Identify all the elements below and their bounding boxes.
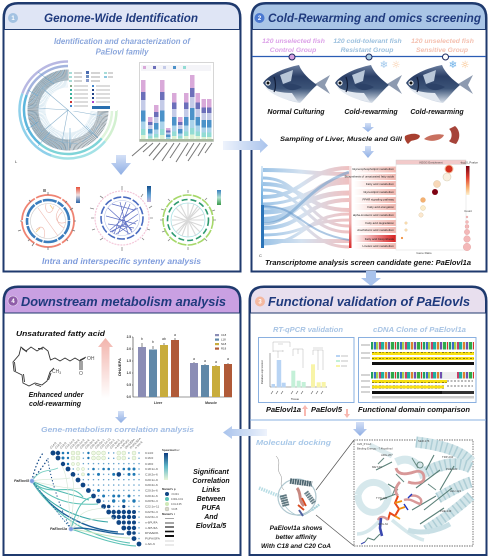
correlation heading: Gene-metabolism correlation analysis [41,425,194,434]
correlation heatmap: DHA/EPA [145,531,159,535]
docking close-up: TRP-204 [442,455,454,459]
icon: up arrow [302,405,308,416]
qPCR chart [258,338,354,402]
step number 2: 2 [258,16,262,22]
bubble plot row labels: alpha-Linolenic acid metabolism [353,213,395,217]
docking close-up: PHE-220 [446,467,458,471]
qPCR chart: Relative expression [260,359,264,384]
docking caption [261,525,331,550]
step number 4: 4 [11,299,15,305]
group label: sensitive: 120 unselected fish [411,38,474,45]
docking caption: With C18 and C20 CoA [261,543,331,550]
bubble plot row labels: Biosynthesis of unsaturated fatty acids [345,174,395,178]
stacked bar chart [132,62,214,162]
bubble plot row labels: Linoleic acid metabolism [362,244,395,248]
protein structure overview [259,456,320,516]
correlation heatmap: C22:6n-3 [145,515,158,519]
heatmap legends: >0.05 [171,508,178,511]
enhanced caption: Enhanced under [29,392,85,399]
bubble plot row labels: Fatty acid metabolism [366,182,395,186]
bubble plot row labels: Arachidonic acid metabolism [357,228,395,232]
group label: resistant [333,38,402,54]
panel header band [252,4,486,30]
docking close-up: SER-176 [418,439,430,443]
panel header band [4,288,240,313]
bar chart: DHA/EPA: L18 [221,338,226,342]
correlation heatmap: C20:1n-9 [145,478,158,482]
gene node: PaElovl1a: PaElovl1a [50,527,67,531]
gene node: PaElovl5: PaElovl5 [14,479,30,483]
section divider [250,419,486,421]
docking close-up: PHE-243 [440,509,452,513]
correlation heatmap: C20:3n-6 [84,438,96,450]
colour scale [147,186,151,202]
bubble plot row labels [345,166,396,249]
fish captions [267,109,464,116]
transcriptome caption: Transcriptome analysis screen candidate gene: PaElovl1a [265,260,471,267]
group label: control: 120 unselected fish [262,38,325,45]
heatmap legends: 0.01-0.05 [171,503,182,506]
bar chart: DHA/EPA: a [193,357,195,361]
bubble plot row labels: PPAR signaling pathway [363,198,395,202]
heading: Cold-Rewarming and omics screening [268,11,482,25]
correlation heatmap: C20:2n-6 [145,483,158,487]
qPCR caption: PaElovl1a [266,407,301,414]
bubble plot row labels: Fatty acid degradation [365,221,394,225]
panel: functional validation [250,286,486,555]
zoom lines [316,440,354,546]
docking close-up: TYR-120 [376,496,388,500]
panel frame [4,3,240,272]
significant correlation note: Correlation [192,478,230,485]
correlation heatmap: C20:4n-6 [89,438,101,450]
icons: cold and warm [380,60,470,71]
bar chart: DHA/EPA: Muscle [205,401,217,405]
panel: downstream metabolism analysis [4,286,240,555]
arrow: to sampling [362,123,374,132]
caption: synteny: Intra and interspecific synteny analysis [42,257,202,266]
significant correlation note: Significant [193,469,230,476]
correlation heatmap: C20:2n-6 [79,438,91,450]
panel frame [252,3,486,272]
heatmap legends: 0.001-0.01 [171,498,184,501]
bubble plot row labels: Glycerolipid metabolism [363,190,395,194]
bar chart: DHA/EPA: DHA/EPA [117,358,122,376]
fish: sensitive [406,65,473,103]
group label: control: Control Group [270,47,316,54]
significant correlation note: Elovl1a/5 [196,523,226,530]
correlation heatmap: C22:5n-3 [145,510,158,514]
correlation heatmap: C18:2n-6 [69,438,81,450]
significant correlation note: Links [202,487,220,494]
molecule: unsaturated fatty acid: CH [52,369,59,375]
heatmap legends: Mantel's p [162,487,176,491]
subtitle: PaElovl family [96,48,149,56]
correlation heatmap [49,437,161,547]
correlation heatmap: PUFA/SFA [129,437,142,450]
bar chart: DHA/EPA: b [141,337,143,341]
arrow: panel 3 to panel 4 [223,426,267,439]
panel frame [250,286,486,555]
docking caption: PaElovl1a shows [270,525,323,532]
significant correlation note: Between [197,496,225,503]
group label: resistant: Resistant Group [341,47,393,54]
synteny circos: intraspecific [18,189,76,250]
gene node: PaElovl5 [14,479,34,483]
fish: resistant [335,65,402,103]
enhanced caption [29,392,85,408]
docking close-up: MET-66 [372,465,382,469]
icons: cold and warm: ☼ [392,60,401,71]
docking close-up: ARG-267 [381,453,393,457]
bar chart: DHA/EPA: 2.5 [127,335,131,339]
fish captions: Cold-rewarming [410,109,464,116]
bar chart: DHA/EPA: 0.5 [127,383,131,387]
bubble plot row labels: Glycerophospholipid metabolism [352,167,395,171]
correlation heatmap: C20:1n-9 [74,438,86,450]
heading: Downstream metabolism analysis [21,294,226,309]
bar chart: DHA/EPA: 0.0 [127,395,131,399]
fish captions: Cold-rewarming [344,109,398,116]
heatmap legends: Mantel's r [162,512,176,516]
step number 1 [8,13,18,23]
correlation heatmap: C22:1n-11 [99,437,112,450]
arrow: to correlation analysis [115,411,127,423]
bubble plot row labels: Fatty acid elongation [367,205,394,209]
correlation heatmap: n-6PUFA [114,438,125,450]
sequence alignment [358,338,476,402]
correlation heatmap: C14:0 [49,441,58,450]
sankey panel letter: C [259,253,262,258]
bar chart: DHA/EPA: 1.0 [127,371,131,375]
step number 3: 3 [258,300,262,306]
bar chart: DHA/EPA: N18 [221,342,227,346]
step number 3 [255,296,265,306]
correlation heatmap: C18:0 [59,441,68,450]
bar chart: DHA/EPA: a [204,359,206,363]
qPCR chart: Tissue [291,397,300,401]
group label: sensitive [411,38,474,54]
icons: cold and warm: ❄ [449,60,457,71]
bar chart: DHA/EPA: 1.5 [127,359,131,363]
group timeline [252,54,486,60]
correlation heatmap: n-3/n-6 [145,542,155,546]
subtitle [54,37,191,56]
correlation heatmap: C16:0 [54,441,63,450]
bar chart: DHA/EPA [117,333,232,405]
correlation heatmap: C22:6n-3 [109,438,121,450]
heading: Genome-Wide Identification [44,11,198,25]
qPCR caption: PaElovl5 [311,407,342,414]
sub-heading: cDNA clone: cDNA Clone of PaElovl1a [373,327,466,334]
arrow: to transcriptome [362,146,374,158]
sub-heading: RT-qPCR: RT-qPCR validation [273,327,343,334]
circular phylogenetic tree [0,42,136,178]
bar chart: DHA/EPA: a [227,357,229,361]
icons: cold and warm: ❄ [380,60,388,71]
icons: organs [405,126,459,144]
subtitle: Identification and characterization of [54,37,191,46]
group label: resistant: 120 cold-tolerant fish [333,38,402,45]
step number 4 [8,296,18,306]
bar chart: DHA/EPA: 2.0 [127,347,131,351]
significant correlation note: And [203,514,219,521]
panel: cold-rewarming and omics screening [252,3,486,272]
correlation heatmap: C20:4n-6 [145,494,158,498]
arrow: panel 1 to panel 2 [223,138,268,153]
docking close-up: LEU-124 [450,489,461,493]
bar chart: DHA/EPA: b [152,340,154,344]
bar chart: DHA/EPA: Liver [154,401,163,405]
bubble plot row labels: Fatty acid biosynthesis [365,237,395,241]
synteny circos: third species [160,190,216,250]
bar chart: DHA/EPA: ab [162,337,166,341]
bar chart: DHA/EPA: R18 [221,346,227,350]
arrow: enhanced up [98,338,113,398]
synteny circos: interspecific [90,186,153,251]
correlation heatmap: C20:5n-3 [94,438,106,450]
tree legend [69,67,117,111]
gene node: PaElovl1a [50,527,73,531]
group label: control [262,38,325,54]
correlation heatmap: n-3/n-6 [134,440,144,450]
docking heading: Molecular docking [256,438,331,447]
correlation heatmap: C18:0 [145,462,154,466]
bar chart: DHA/EPA: C18 [221,333,227,337]
group label: sensitive: Sensitive Group [416,47,468,54]
bubble plot legend [460,160,478,251]
significant correlation note [192,469,230,530]
step number 1: 1 [11,16,15,22]
bar chart: DHA/EPA: a [174,333,176,337]
bubble plot legend: Count [464,209,472,213]
correlation heatmap: C20:5n-3 [145,499,158,503]
colour scale [76,187,80,203]
icons: cold and warm: ☼ [461,60,470,71]
docking close-up: ARG-62 [378,522,389,526]
docking close-up: Binding Energy: -7.4kcal/mol [357,446,393,450]
panel: genome-wide identification [0,3,240,272]
colour scale [217,190,221,205]
correlation heatmap: C18:1n-9 [145,467,158,471]
correlation heatmap: C22:5n-3 [104,438,116,450]
icon: down arrow [344,409,350,418]
correlation heatmap: C16:0 [145,456,154,460]
arrow: down to synteny [111,155,131,175]
correlation network links [32,453,136,546]
bar chart: DHA/EPA: a [215,360,217,364]
panel frame [4,286,240,555]
docking close-up: C20_6'CoA [357,442,371,446]
correlation heatmap: C18:1n-9 [64,438,76,450]
correlation heatmap: n-3PUFA [119,438,130,450]
bubble plot: KEGG Enrichment [419,160,443,164]
correlation heatmap: C18:2n-6 [145,472,158,476]
bubble plot legend: -log10_Pvalue [460,160,478,164]
bubble plot [396,160,466,250]
molecule: unsaturated fatty acid: OH [87,356,95,362]
alignment caption: Functional domain comparison [358,407,470,414]
correlation heatmap: n-3PUFA [145,526,158,530]
heatmap legends [162,448,184,545]
arrow: panel 2 to panel 3 [361,271,381,286]
panel header band [250,288,486,313]
sankey diagram [261,166,352,248]
panel header band [4,4,240,30]
fish: normal culturing [263,65,330,103]
axis label: Gene Ratio [416,251,432,255]
correlation heatmap: DHA/EPA [124,438,136,450]
correlation heatmap: PUFA/SFA [145,536,161,540]
significant correlation note: PUFA [202,505,220,512]
correlation heatmap: n-6PUFA [145,520,158,524]
correlation heatmap: C22:1n-11 [145,504,159,508]
correlation heatmap: C14:0 [145,451,154,455]
fatty acid heading: Unsaturated fatty acid [16,331,106,338]
heatmap legends: <0.001 [171,493,179,496]
heading: Functional validation of PaElovls [268,294,470,309]
arrow: to docking box [353,422,367,436]
panel letter: L [15,159,18,164]
sampling caption: Sampling of Liver, Muscle and Gill [280,136,402,143]
fish captions: Normal Culturing [267,109,325,116]
docking close-up [354,439,473,546]
molecule: unsaturated fatty acid: O [79,371,83,377]
molecule: unsaturated fatty acid [13,347,95,386]
step number 2 [254,13,264,23]
heatmap legends: Spearman's r [162,448,181,452]
enhanced caption: cold-rewarming [29,401,82,408]
docking caption: better affinity [275,534,317,541]
qPCR caption [266,407,342,414]
correlation heatmap: C20:3n-6 [145,488,158,492]
molecule: unsaturated fatty acid: 3 [59,371,61,375]
